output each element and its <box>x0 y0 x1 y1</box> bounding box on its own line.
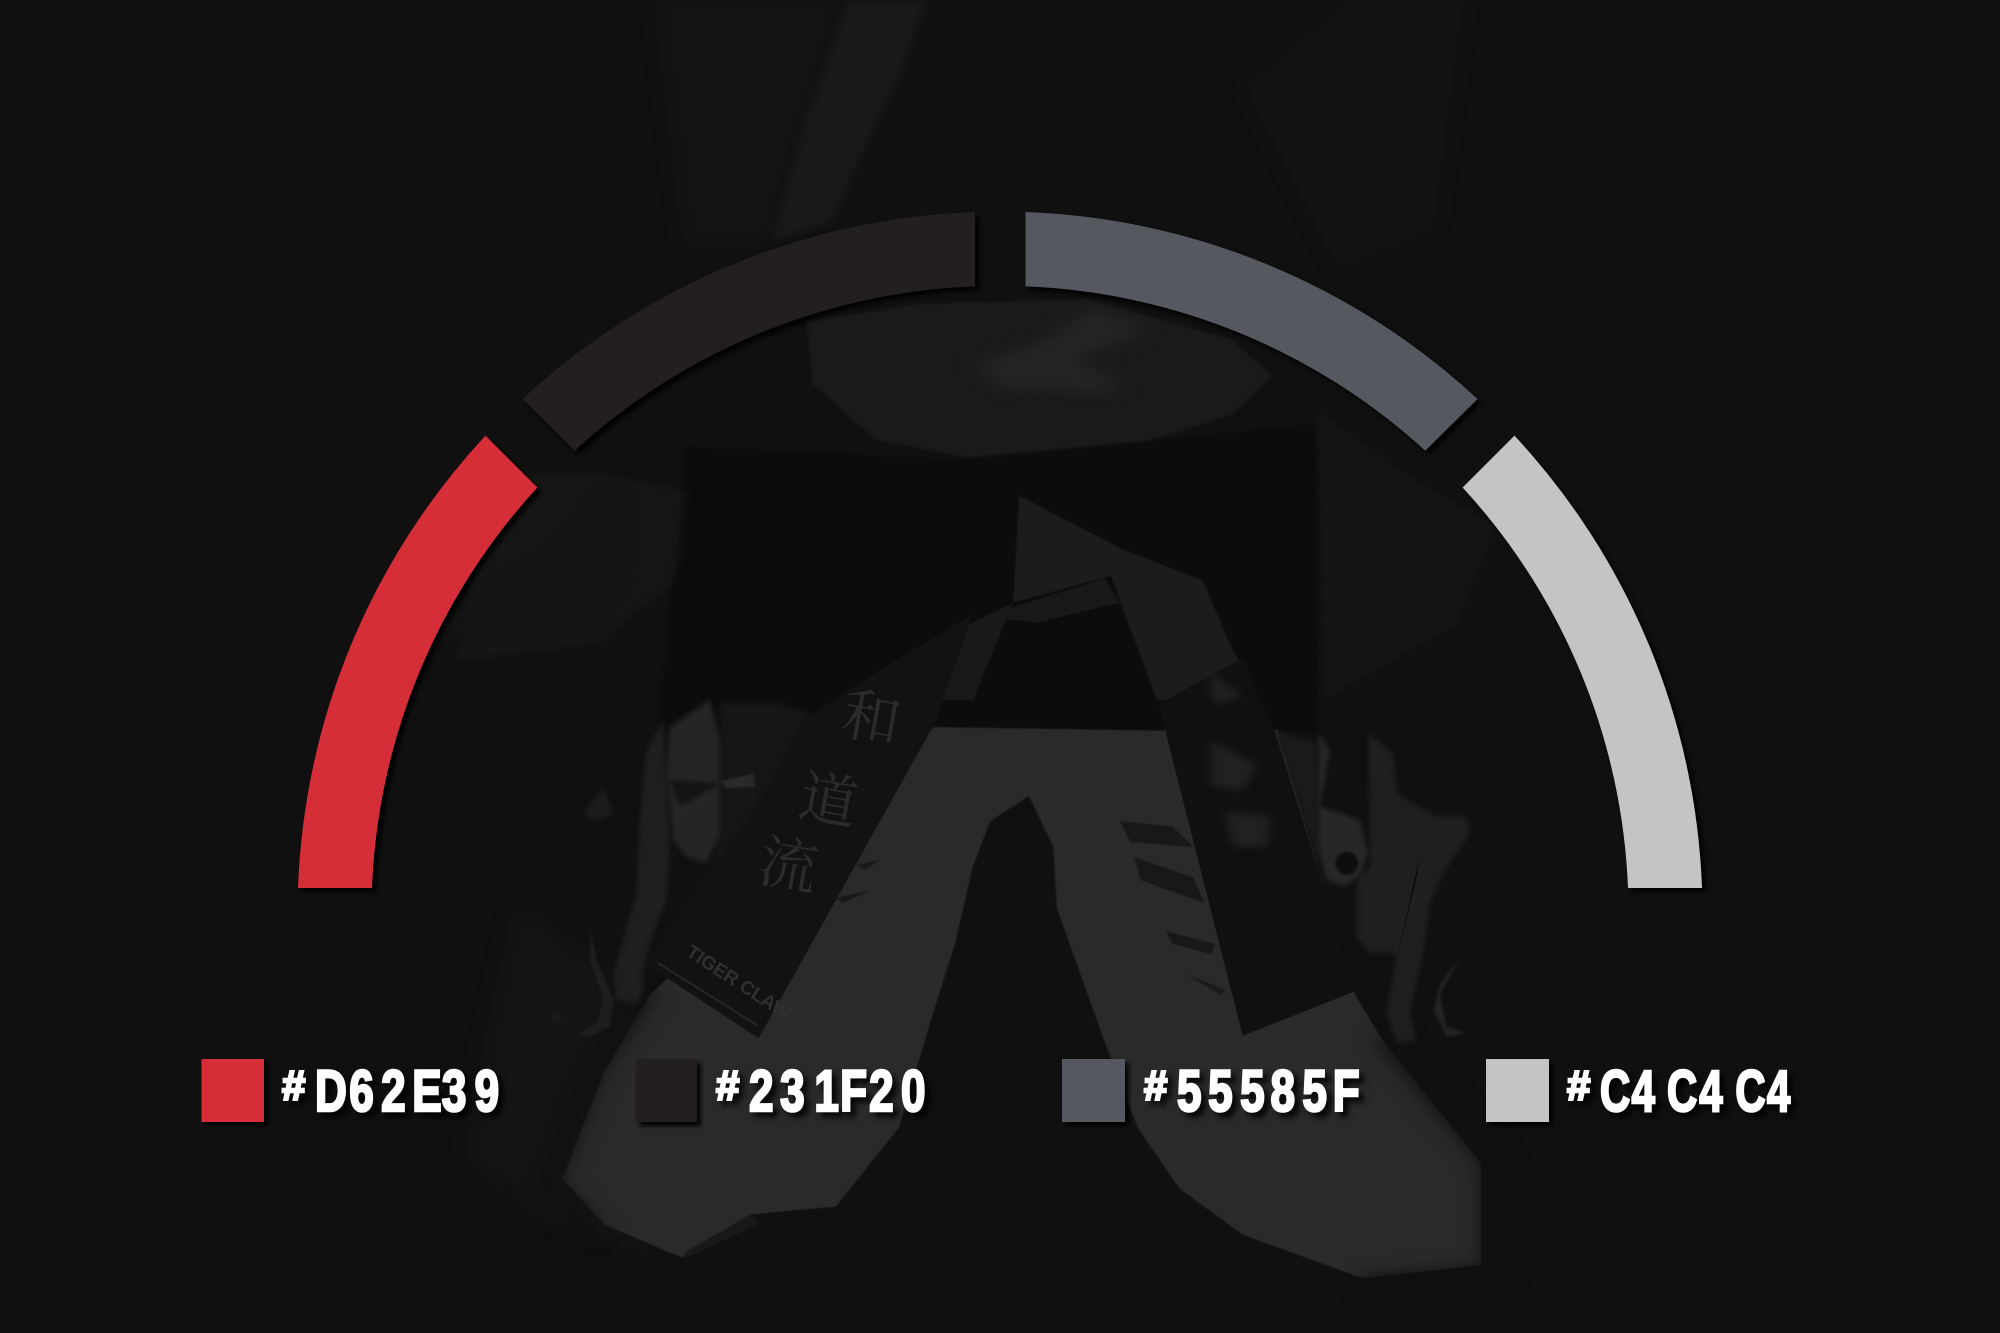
hex label: C4C4C4: # <box>1567 1062 1590 1109</box>
belt brand label: TIGER CLAW <box>682 942 794 1024</box>
arc: red <box>298 436 537 888</box>
legs and belt <box>471 615 1495 1286</box>
belt embroidery: 和 <box>837 682 906 756</box>
jacket upper body <box>456 0 1495 732</box>
swatch: grey <box>1062 1059 1125 1122</box>
legend: red <box>202 1058 499 1123</box>
arc: grey <box>1026 212 1478 451</box>
hex label: 55585F: # <box>1144 1062 1167 1109</box>
belt embroidery <box>754 682 906 903</box>
right hand <box>1275 730 1470 1043</box>
legend: grey <box>1062 1058 1360 1123</box>
hex label: 231F20: # <box>716 1062 739 1109</box>
hex label: D62E39: # <box>282 1062 305 1109</box>
swatch: light grey <box>1486 1059 1549 1122</box>
hex label: 55585F: 55585F <box>1177 1058 1360 1123</box>
left hand <box>547 700 810 1038</box>
legend: light grey <box>1486 1058 1790 1124</box>
dim outer legs <box>471 908 660 1255</box>
belt stitch line <box>658 963 757 1025</box>
hex label: C4C4C4: C4C4C4 <box>1600 1058 1790 1124</box>
pants fold marks <box>681 821 1225 1260</box>
hex label: 231F20: 231F20 <box>749 1058 926 1123</box>
pants <box>562 727 1481 1278</box>
right belt tail <box>1159 658 1356 1036</box>
soft fade on pants edges <box>545 990 643 1235</box>
right belt embroidery <box>1208 671 1271 847</box>
semicircular belt-rank gauge <box>298 212 1702 888</box>
swatch: black <box>636 1059 697 1122</box>
hex label: D62E39: D62E39 <box>315 1058 499 1123</box>
swatch: red <box>202 1059 264 1122</box>
belt embroidery: 道 <box>794 764 863 838</box>
belt embroidery: 流 <box>754 829 823 903</box>
arc: light grey <box>1463 436 1702 888</box>
arc: black <box>522 212 975 451</box>
legend: black <box>636 1058 926 1123</box>
left sleeve folds <box>440 480 625 635</box>
left belt tail <box>646 615 973 1038</box>
